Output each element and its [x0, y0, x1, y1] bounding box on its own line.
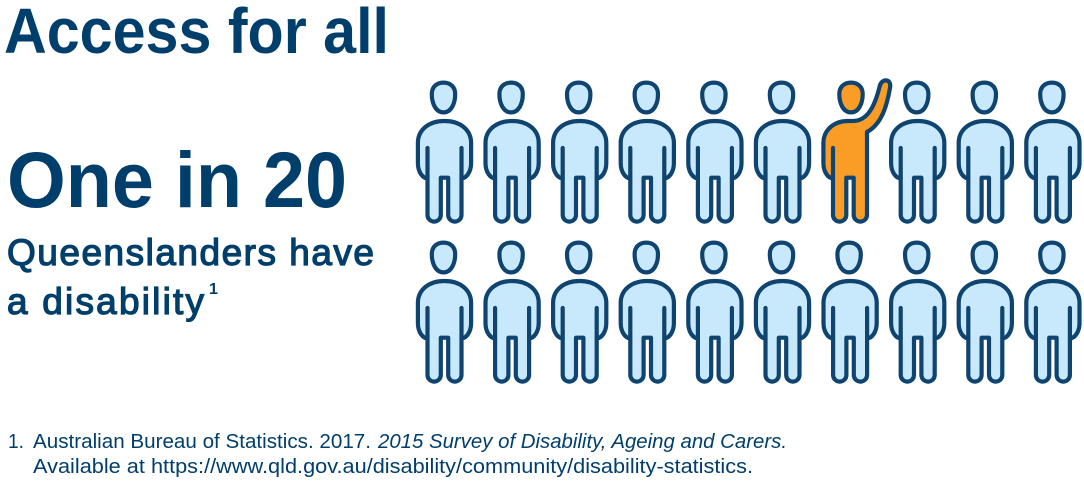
- footnote: [8, 431, 787, 478]
- pictogram: twenty people, one highlighted: [418, 80, 1079, 382]
- person row 2: [418, 243, 1079, 382]
- footnote: 1.: [8, 431, 24, 453]
- footnote: Available at https://www.qld.gov.au/disability/community/disability-statistics.: [33, 456, 753, 478]
- statistic description: Queenslanders have: [7, 232, 374, 273]
- statistic heading: One in 20: [7, 135, 347, 224]
- statistic description: a disability: [7, 281, 204, 322]
- statistic description: [7, 232, 374, 322]
- footnote: Australian Bureau of Statistics. 2017.: [33, 431, 371, 453]
- icon: orange person with raised arm: [823, 80, 890, 222]
- person row 1: [418, 83, 1079, 222]
- footnote: 2015 Survey of Disability, Ageing and Carers.: [377, 431, 787, 453]
- statistic description: 1: [209, 281, 218, 298]
